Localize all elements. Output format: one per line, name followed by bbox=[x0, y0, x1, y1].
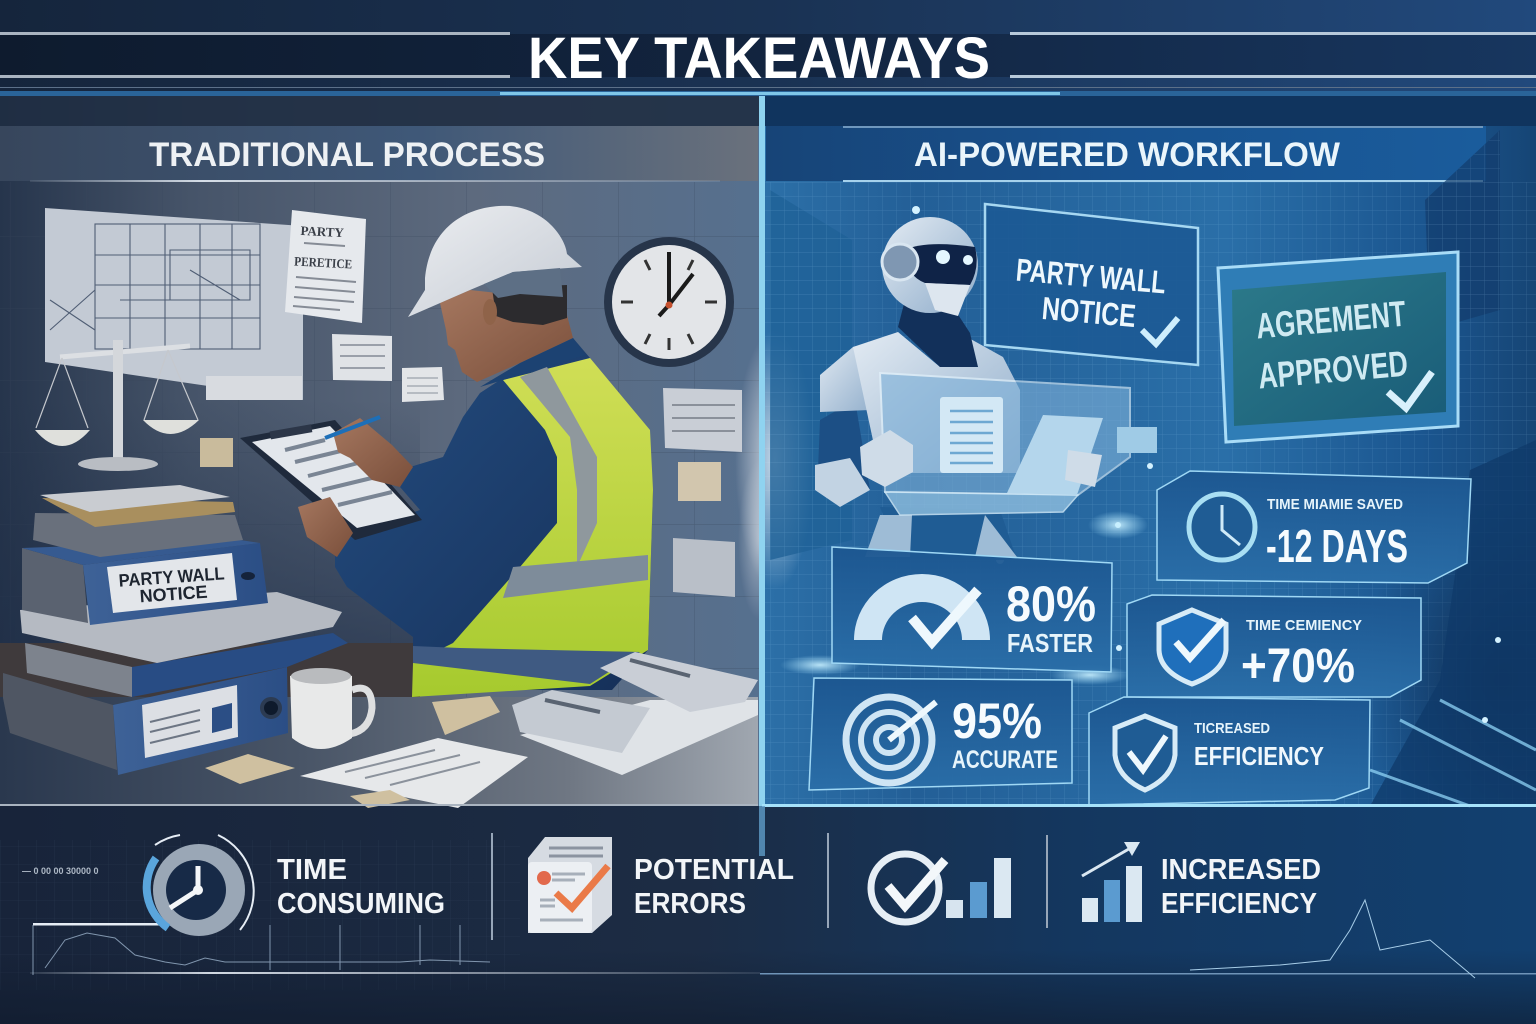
card: party wall notice bbox=[985, 204, 1198, 365]
clipboard bbox=[240, 420, 422, 540]
stat card: 80% faster: 80% bbox=[1006, 576, 1096, 632]
body jacket bbox=[335, 338, 653, 690]
footer takeaways bbox=[22, 833, 1536, 978]
footer chart lines bbox=[30, 900, 1536, 978]
icon: scales of justice bbox=[35, 340, 199, 471]
binder stack bbox=[3, 485, 348, 775]
robot head bbox=[882, 217, 978, 313]
robot shoulder bbox=[820, 340, 880, 412]
takeaway: increased efficiency: INCREASED bbox=[1161, 854, 1321, 886]
stat card: 95% accurate: 95% bbox=[952, 693, 1042, 749]
stat card: 95% accurate bbox=[809, 678, 1072, 790]
takeaway: potential errors bbox=[528, 837, 794, 933]
takeaway: time consuming: TIME bbox=[277, 854, 347, 886]
robot bbox=[815, 217, 1157, 560]
party notice paper: PARTY bbox=[300, 223, 345, 240]
stat card: time efficiency +70%: TIME CEMIENCY bbox=[1246, 617, 1362, 634]
writing hand and pen bbox=[325, 417, 413, 487]
bottom binder bbox=[3, 673, 117, 770]
digital backdrop bbox=[770, 130, 1536, 806]
coffee mug bbox=[290, 668, 372, 749]
binder stack: NOTICE bbox=[139, 582, 208, 606]
takeaway: potential errors: POTENTIAL bbox=[634, 854, 794, 886]
holding hand bbox=[298, 497, 353, 557]
right panel heading: AI-POWERED WORKFLOW bbox=[914, 136, 1341, 174]
left panel background bbox=[0, 96, 782, 806]
wood shelf bbox=[0, 643, 420, 698]
takeaway: time consuming bbox=[22, 835, 445, 936]
takeaway: time consuming: CONSUMING bbox=[277, 888, 445, 920]
right panel heading bbox=[766, 126, 1486, 182]
takeaway: potential errors: ERRORS bbox=[634, 888, 746, 920]
footer band bbox=[0, 806, 1536, 1024]
stat card: increased efficiency: EFFICIENCY bbox=[1194, 741, 1324, 771]
clock bbox=[604, 237, 734, 367]
top binder bbox=[22, 548, 88, 623]
takeaway: increased efficiency: EFFICIENCY bbox=[1161, 888, 1317, 920]
stat card: 80% faster bbox=[832, 547, 1112, 672]
top paper stack bbox=[33, 513, 243, 557]
panel: traditional process bbox=[0, 126, 758, 808]
papers on desk bbox=[205, 652, 758, 808]
divider glow bbox=[759, 96, 765, 806]
neck and face bbox=[440, 290, 573, 382]
hard hat bbox=[408, 206, 582, 317]
title: KEY TAKEAWAYS bbox=[528, 26, 990, 91]
stat card: 95% accurate: ACCURATE bbox=[952, 746, 1058, 774]
hi-vis vest bbox=[412, 358, 653, 697]
stat card: increased efficiency bbox=[1089, 697, 1370, 805]
stat card: 80% faster: FASTER bbox=[1007, 628, 1093, 658]
robot arm bbox=[818, 400, 870, 490]
stat card: time saved: -12 DAYS bbox=[1266, 520, 1408, 572]
party notice paper bbox=[285, 210, 366, 323]
collar bbox=[480, 338, 585, 387]
stat card: time efficiency +70%: +70% bbox=[1241, 640, 1355, 693]
stat card: increased efficiency: TICREASED bbox=[1194, 720, 1270, 737]
desk bbox=[0, 697, 758, 804]
stat card: time saved bbox=[1157, 471, 1471, 583]
card: agreement approved: APPROVED bbox=[1256, 343, 1409, 397]
hair bbox=[492, 285, 567, 325]
title bbox=[0, 26, 1536, 91]
blueprint bbox=[45, 208, 303, 400]
middle binder bbox=[25, 643, 132, 697]
holographic tablet bbox=[880, 373, 1130, 495]
icon: check and bars bbox=[871, 854, 1011, 922]
takeaway: increased efficiency bbox=[1082, 842, 1321, 922]
card: agreement approved: AGREMENT bbox=[1254, 293, 1407, 347]
takeaway: time consuming: — 0 00 00 30000 0 bbox=[22, 866, 99, 876]
loose papers bbox=[20, 592, 342, 663]
card: party wall notice: NOTICE bbox=[1041, 290, 1137, 334]
card: party wall notice: PARTY WALL bbox=[1015, 252, 1167, 301]
left panel heading bbox=[0, 126, 758, 182]
footer glow line bbox=[0, 804, 1536, 856]
stat card: time efficiency +70% bbox=[1127, 595, 1421, 697]
card: agreement approved bbox=[1218, 252, 1458, 442]
binder stack: PARTY WALL bbox=[118, 563, 225, 591]
header band bbox=[0, 0, 1536, 98]
robot chest bbox=[853, 332, 1020, 473]
stat card: time saved: TIME MIAMIE SAVED bbox=[1267, 496, 1403, 513]
panel: AI-powered workflow bbox=[766, 126, 1536, 806]
robot neck bbox=[898, 300, 978, 367]
reflective stripes bbox=[520, 367, 597, 567]
pinned notes bbox=[200, 334, 742, 597]
right panel background bbox=[735, 96, 1536, 860]
worker bbox=[335, 206, 653, 697]
lower body bbox=[880, 507, 1017, 560]
left panel heading: TRADITIONAL PROCESS bbox=[149, 136, 545, 174]
robot right hand bbox=[1065, 450, 1102, 487]
robot left hand bbox=[860, 430, 913, 487]
party notice paper: PERETICE bbox=[294, 253, 353, 272]
